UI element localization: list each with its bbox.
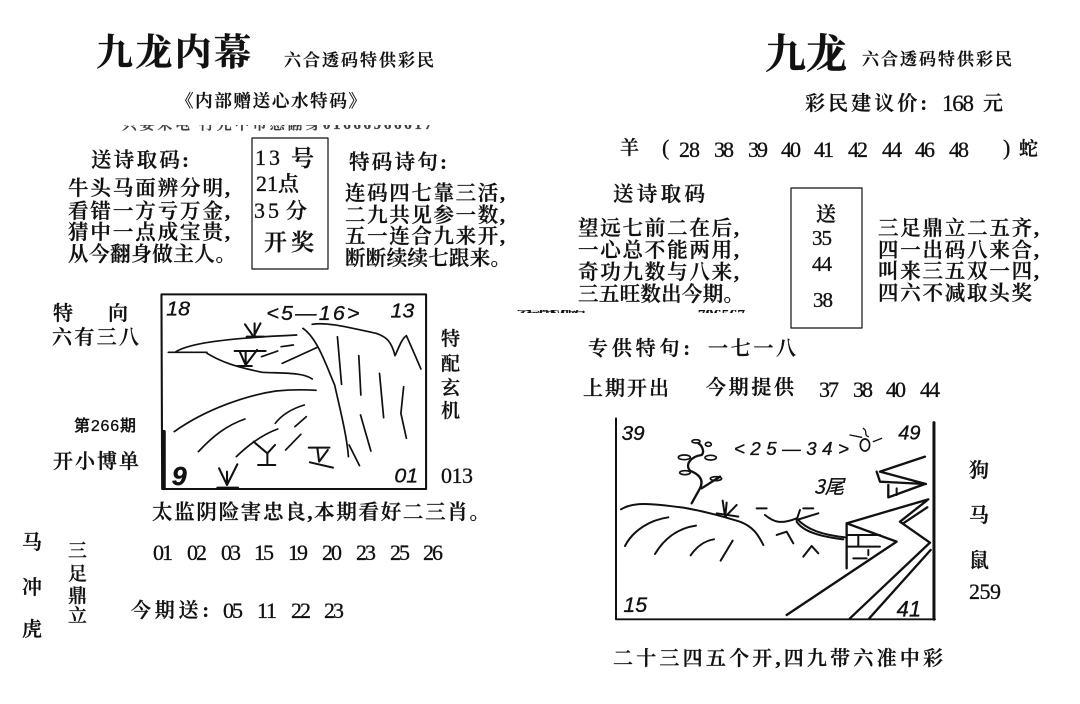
poem left: [578, 217, 744, 306]
vertical label: three legs: 立: [68, 605, 87, 627]
subheading: 《内部赠送心水特码》: [176, 91, 366, 111]
vertical label: special pairing: [441, 328, 461, 422]
subtitle: 六合透码特供彩民: [284, 51, 434, 70]
zodiac number row: 28: [679, 137, 700, 162]
draw time box: 分: [286, 199, 307, 223]
special supply phrase: [588, 337, 796, 360]
last issue and this issue row: 40: [886, 377, 906, 402]
number row: 23: [356, 540, 376, 565]
vertical zodiac labels: 鼠: [969, 549, 989, 572]
number row: [153, 540, 443, 565]
special phrase label: 特: [53, 302, 73, 325]
suggested price: 彩民建议价:: [805, 92, 927, 115]
special phrase label: 六有三八: [52, 326, 139, 349]
vertical zodiac labels: 虎: [22, 618, 42, 641]
zodiac number row: 40: [781, 137, 801, 162]
poem right: 三足鼎立二五齐,: [878, 217, 1039, 240]
special phrase label: [52, 302, 139, 349]
draw time box: [252, 138, 328, 269]
title: 九龙: 九龙: [765, 31, 847, 77]
vertical label: special pairing: 机: [441, 400, 460, 422]
vertical zodiac labels: 马: [22, 531, 42, 554]
vertical label: three legs: 足: [68, 563, 87, 585]
gift number box: 44: [812, 252, 832, 276]
suggested price: [805, 91, 1003, 116]
poem right: [878, 217, 1039, 305]
slogan line: 太监阴险害忠良,本期看好二三肖。: [152, 501, 490, 524]
suggested price: 元: [983, 92, 1003, 115]
number 259: 259: [969, 579, 1001, 604]
sketch: hill and house: 3尾: [814, 471, 846, 499]
poem left: 望远七前二在后,: [578, 217, 739, 240]
number row: 02: [187, 540, 207, 565]
number row: 15: [254, 540, 274, 565]
clipped scan line: 796567: [698, 307, 746, 323]
vertical label: three legs: 三: [68, 540, 87, 562]
number row: 19: [288, 540, 308, 565]
poem left: 三五旺数出今期。: [578, 282, 744, 306]
vertical zodiac labels: 冲: [22, 576, 42, 599]
title: 九龙内幕: 九龙内幕: [96, 32, 251, 74]
poem right: 连码四七靠三活,: [345, 182, 505, 205]
subtitle: 六合透码特供彩民: [862, 50, 1012, 69]
gift number box: 送: [816, 203, 836, 226]
vertical zodiac labels: [969, 459, 989, 572]
number row: 25: [390, 540, 410, 565]
zodiac number row: 41: [814, 137, 834, 162]
issue number: 第266期: [74, 417, 136, 435]
zodiac number row: 48: [949, 137, 969, 162]
poem left: 奇功九数与八来,: [578, 261, 739, 284]
zodiac number row: 羊: [620, 137, 639, 159]
panel: right sheet: [517, 31, 1039, 670]
heading: poem for code: 送诗取码: [613, 183, 705, 206]
poem right: [345, 182, 511, 270]
zodiac number row: ): [1003, 135, 1010, 160]
this issue numbers: 今期送:: [131, 598, 209, 622]
draw time box: 35: [254, 198, 279, 223]
zodiac number row: 42: [848, 137, 868, 162]
poem right: 二九共见参一数,: [345, 204, 505, 227]
number row: 20: [322, 540, 342, 565]
sketch: cliff landscape: 9: [172, 461, 187, 491]
vertical label: special pairing: 配: [441, 353, 460, 375]
vertical zodiac labels: 马: [969, 504, 989, 527]
panel: left sheet: [22, 32, 511, 641]
vertical label: special pairing: 特: [441, 328, 460, 350]
sketch: cliff landscape: 18: [166, 298, 190, 321]
sketch: hill and house: <25—34>: [734, 438, 849, 459]
last issue and this issue row: [583, 375, 940, 402]
last issue and this issue row: 38: [853, 377, 873, 402]
clipped scan line: [518, 310, 745, 313]
poem right: 叫来三五双一四,: [878, 260, 1039, 283]
last issue and this issue row: 今期提供: [706, 375, 795, 399]
sketch: cliff landscape: 01: [394, 465, 418, 487]
sketch: hill and house: [616, 418, 935, 622]
draw time box: 号: [291, 146, 314, 171]
zodiac number row: 44: [882, 137, 902, 162]
poem left: 一心总不能两用,: [578, 239, 739, 262]
this issue numbers: 05: [223, 598, 243, 623]
poem right: 四六不减取头奖: [878, 282, 1032, 305]
sketch: cliff landscape: [161, 294, 426, 491]
zodiac number row: 46: [915, 137, 935, 162]
last issue and this issue row: 44: [920, 377, 940, 402]
draw time box: 开奖: [264, 230, 314, 255]
number row: 03: [221, 540, 241, 565]
gift number box: 38: [813, 288, 833, 312]
draw time box: 21: [256, 171, 278, 196]
poem left: 猜中一点成宝贵,: [68, 221, 230, 244]
draw time box: 点: [278, 172, 300, 196]
heading: special code poem: 特码诗句:: [349, 151, 447, 174]
sketch: hill and house: 41: [897, 597, 921, 622]
sketch: hill and house: 15: [623, 593, 647, 617]
this issue numbers: 11: [257, 598, 277, 623]
slogan line: 二十三四五个开,四九带六准中彩: [613, 647, 943, 670]
gift number box: 35: [812, 226, 832, 250]
zodiac number row: 39: [748, 137, 768, 162]
last issue and this issue row: 37: [819, 377, 839, 402]
sketch: hill and house: 49: [898, 422, 921, 444]
poem right: 断断续续七跟来。: [345, 247, 511, 270]
number row: 26: [423, 540, 443, 565]
this issue numbers: [131, 598, 344, 623]
poem left: 看错一方亏万金,: [68, 200, 230, 223]
last issue and this issue row: 上期开出: [583, 377, 669, 400]
poem left: [68, 177, 236, 266]
poem left: 从今翻身做主人。: [68, 242, 236, 266]
zodiac number row: (: [662, 135, 669, 160]
clipped scan line: 家园版权所有: [517, 305, 587, 323]
suggested price: 168: [942, 91, 974, 116]
vertical zodiac labels: [22, 531, 42, 641]
draw time box: 13: [255, 145, 280, 170]
poem right: 五一连合九来开,: [345, 225, 505, 248]
special supply phrase: 一七一八: [708, 337, 796, 360]
this issue numbers: 23: [324, 598, 344, 623]
clipped scan line: 只要来电 行先中市感翻身01666966617: [122, 115, 432, 133]
poem right: 四一出码八来合,: [878, 239, 1039, 262]
vertical label: three legs: 鼎: [68, 585, 87, 607]
this issue numbers: 22: [291, 598, 311, 623]
number row: 01: [153, 540, 173, 565]
vertical zodiac labels: 狗: [969, 459, 989, 482]
open small bet single: 开小博单: [53, 450, 139, 473]
special phrase label: 向: [108, 302, 128, 325]
sketch: cliff landscape: 13: [391, 300, 415, 323]
poem left: 牛头马面辨分明,: [68, 177, 230, 200]
zodiac number row: 蛇: [1019, 138, 1038, 160]
sketch: cliff landscape: <5—16>: [266, 302, 359, 325]
zodiac number row: 38: [714, 137, 734, 162]
sketch: hill and house: 39: [622, 422, 645, 445]
vertical label: three legs: [68, 540, 87, 627]
heading: poem for code: 送诗取码:: [91, 149, 189, 172]
gift number box: [791, 188, 862, 328]
number 013: 013: [441, 463, 473, 488]
special supply phrase: 专供特句:: [588, 337, 690, 360]
zodiac number row: [620, 135, 1038, 162]
vertical label: special pairing: 玄: [441, 377, 461, 399]
